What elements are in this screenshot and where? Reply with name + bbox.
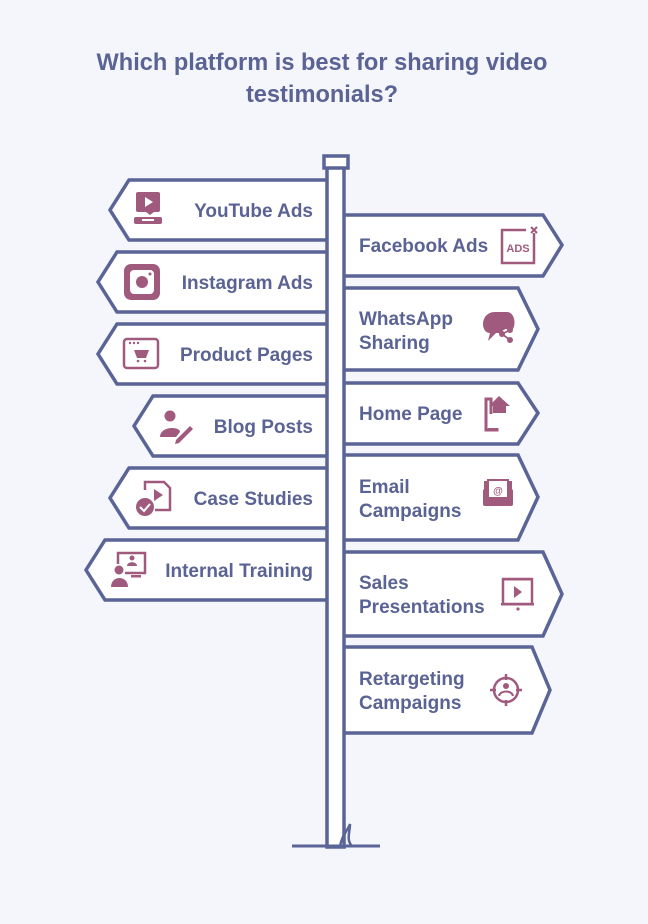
sign: Internal Training: Internal Training: [165, 561, 313, 582]
sign: Internal Training: [86, 540, 332, 600]
sign: Sales Presentations: Presentations: [359, 597, 485, 618]
icon: email: @: [493, 486, 503, 497]
sign: Case Studies: [110, 468, 332, 528]
sign: Home Page: [340, 383, 538, 444]
title: testimonials?: [246, 82, 398, 108]
icon: ads: [502, 227, 537, 263]
sign: Facebook Ads: Facebook Ads: [359, 236, 488, 257]
icon: email: [483, 480, 513, 506]
sign: Product Pages: [98, 324, 332, 384]
icon: chat share: [483, 312, 514, 343]
sign: Instagram Ads: [98, 252, 332, 312]
sign: Blog Posts: Blog Posts: [214, 417, 313, 438]
sign: Retargeting Campaigns: Campaigns: [359, 693, 461, 714]
sign: Facebook Ads: [340, 215, 562, 276]
sign: Email Campaigns: Campaigns: [359, 501, 461, 522]
icon: blog: [160, 410, 193, 444]
icon: product page: [124, 339, 158, 368]
sign: WhatsApp Sharing: [340, 288, 538, 370]
sign: YouTube Ads: YouTube Ads: [194, 201, 313, 222]
icon: ads: ADS: [506, 243, 530, 255]
icon: case studies: [136, 482, 170, 516]
pole: [292, 156, 380, 847]
title: Which platform is best for sharing video: [97, 50, 547, 76]
icon: training: [111, 553, 145, 587]
sign: Home Page: Home Page: [359, 404, 462, 425]
sign: Retargeting Campaigns: [340, 647, 550, 733]
icon: instagram: [124, 264, 160, 300]
sign: Blog Posts: [134, 396, 332, 456]
sign: Product Pages: Product Pages: [180, 345, 313, 366]
sign: WhatsApp Sharing: WhatsApp: [359, 309, 453, 330]
icon: youtube: [134, 192, 162, 224]
sign: Retargeting Campaigns: Retargeting: [359, 669, 465, 690]
icon: target: [490, 674, 522, 706]
sign: Sales Presentations: Sales: [359, 573, 409, 594]
sign: Email Campaigns: Email: [359, 477, 410, 498]
sign: Instagram Ads: Instagram Ads: [182, 273, 313, 294]
sign: WhatsApp Sharing: Sharing: [359, 333, 430, 354]
icon: home phone: [486, 396, 510, 431]
title: [97, 50, 547, 108]
icon: presentation: [501, 578, 534, 611]
sign: Case Studies: Case Studies: [194, 489, 313, 510]
sign: Email Campaigns: [340, 455, 538, 540]
sign: YouTube Ads: [110, 180, 332, 240]
sign: Sales Presentations: [340, 552, 562, 636]
